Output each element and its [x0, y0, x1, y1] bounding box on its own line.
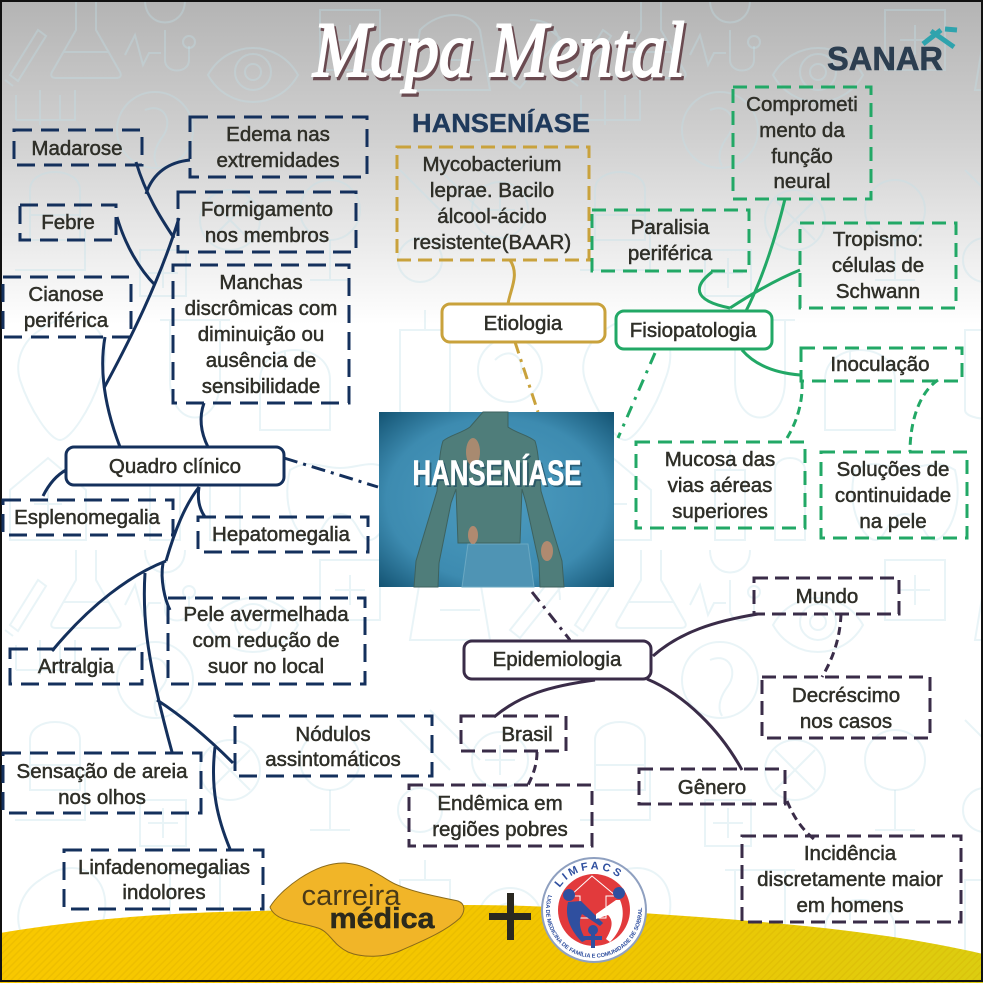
node: Fisiopatologia — [616, 311, 772, 349]
box: Nódulos assintomáticos — [235, 716, 432, 776]
box: Decréscimo nos casos — [762, 677, 930, 738]
yellow bottom wave — [0, 905, 983, 983]
central image: hanseníase: HANSENÍASE — [414, 455, 584, 495]
box: Hepatomegalia — [198, 517, 368, 552]
logo: SANAR: SANAR — [827, 40, 943, 77]
logo: LIMFACS: LIMFACS — [554, 862, 622, 888]
box: Comprometimento da função neural: mento da — [759, 119, 845, 142]
box: Cianose periférica: Cianose — [28, 283, 104, 306]
box: Tropismo: células de — [832, 254, 924, 277]
central image: hanseníase: HANSENÍASE — [412, 453, 582, 493]
logo: LIMFACS — [541, 857, 647, 963]
connectors: epidemiologia — [494, 592, 841, 840]
box: Pele avermelhada: com redução de — [192, 629, 340, 652]
node: Fisiopatologia: Fisiopatologia — [630, 319, 757, 342]
box: Comprometimento da função neural: função — [771, 145, 833, 168]
box: Linfadenomegalias indolores: indolores — [122, 881, 206, 904]
box: Esplenomegalia: Esplenomegalia — [14, 506, 161, 529]
box: Hepatomegalia: Hepatomegalia — [212, 523, 351, 546]
box: Endêmica em regiões pobres — [409, 785, 592, 846]
node: Etiologia — [442, 304, 605, 342]
box: Incidência: discretamente maior — [757, 868, 943, 891]
box: Manchas discrômicas — [173, 265, 349, 403]
box: Nódulos assintomáticos: Nódulos — [295, 723, 371, 746]
box: Gênero: Gênero — [678, 776, 746, 799]
node: Epidemiologia — [464, 641, 651, 679]
title: Mapa Mental: Mapa Mental — [312, 6, 685, 93]
title: Mapa Mental: Mapa Mental — [314, 9, 687, 96]
box: Linfadenomegalias indolores — [64, 850, 263, 909]
box: Manchas discrômicas: discrômicas com — [185, 297, 337, 320]
box: Tropismo: Schwann — [836, 280, 920, 303]
box: Artralgia: Artralgia — [38, 655, 115, 678]
central image: hanseníase — [379, 412, 614, 587]
box: Edema nas extremidades: extremidades — [216, 149, 340, 172]
box: Paralisia periférica: Paralisia — [631, 216, 710, 239]
node: Quadro clínico — [66, 447, 284, 485]
box: Manchas discrômicas: diminuição ou — [198, 323, 324, 346]
heading: HANSENÍASE: HANSENÍASE — [412, 108, 590, 138]
box: Cianose periférica — [3, 277, 131, 337]
box: etiologia description: leprae. Bacilo — [430, 179, 554, 202]
box: Mundo: Mundo — [796, 585, 858, 608]
box: Febre: Febre — [41, 211, 95, 234]
box: Edema nas extremidades: Edema nas — [226, 123, 330, 146]
figure — [414, 412, 564, 587]
box: Gênero — [639, 769, 785, 804]
box: Tropismo: Tropismo: — [833, 228, 923, 251]
connectors: fisiopatologia — [618, 199, 938, 452]
plus sign — [489, 893, 531, 940]
box: Manchas discrômicas: sensibilidade — [202, 375, 320, 398]
logo: SANAR — [827, 29, 957, 77]
box: Madarose: Madarose — [31, 137, 123, 160]
box: Soluções de continuidade na pele: na pele — [859, 510, 927, 533]
box: Pele avermelhada — [168, 598, 365, 684]
box: Cianose periférica: periférica — [24, 309, 109, 332]
box: Artralgia — [10, 649, 142, 684]
box: Inoculação: Inoculação — [830, 353, 930, 376]
box: Soluções de continuidade na pele: continuidade — [835, 484, 951, 507]
box: Paralisia periférica — [592, 210, 749, 271]
box: Madarose — [14, 130, 142, 165]
box: Manchas discrômicas: ausência de — [206, 349, 316, 372]
box: Linfadenomegalias indolores: Linfadenomegalias — [78, 856, 250, 879]
box: Brasil — [461, 716, 566, 751]
box: Mundo — [754, 578, 899, 614]
box: etiologia description: álcool-ácido — [437, 205, 547, 228]
box: Incidência — [742, 836, 961, 922]
connectors: etiologia — [508, 260, 538, 412]
box: Endêmica em regiões pobres: regiões pobres — [432, 818, 568, 841]
node: Epidemiologia: Epidemiologia — [493, 648, 622, 671]
box: Brasil: Brasil — [501, 723, 553, 746]
box: Mucosa das vias aéreas superiores: Mucosa das — [665, 448, 775, 471]
box: etiologia description: Mycobacterium — [422, 153, 562, 176]
node: Etiologia: Etiologia — [484, 312, 563, 335]
box: Mucosa das vias aéreas superiores — [636, 442, 805, 528]
box: Sensação de areia nos olhos: nos olhos — [58, 786, 146, 809]
box: Comprometimento da função neural: Comprometi — [746, 93, 858, 116]
box: Inoculação — [801, 348, 962, 381]
box: Decréscimo nos casos: nos casos — [800, 710, 892, 733]
box: Pele avermelhada: Pele avermelhada — [183, 603, 349, 626]
logo: carreira médica: carreira — [302, 880, 401, 912]
logo: LIMFACS: LIGA DE MEDICINA DE FAMÍLIA E COMUNIDADE DE SOBRAL — [546, 895, 642, 958]
box: Sensação de areia nos olhos — [3, 753, 201, 813]
box: Soluções de continuidade na pele: Soluções de — [837, 458, 949, 481]
logo: carreira médica: médica — [330, 903, 435, 935]
box: etiologia description: resistente(BAAR) — [413, 231, 571, 254]
box: Endêmica em regiões pobres: Endêmica em — [437, 792, 563, 815]
box: Formigamento nos membros: Formigamento — [201, 198, 333, 221]
box: Comprometimento da função neural — [733, 87, 871, 199]
box: Formigamento nos membros — [178, 192, 356, 252]
box: Soluções de continuidade na pele — [821, 452, 967, 538]
box: etiologia description — [397, 147, 589, 260]
box: Paralisia periférica: periférica — [628, 242, 713, 265]
box: Edema nas extremidades — [190, 117, 367, 177]
box: Formigamento nos membros: nos membros — [205, 224, 329, 247]
box: Esplenomegalia — [3, 500, 173, 535]
box: Pele avermelhada: suor no local — [208, 655, 324, 678]
box: Mucosa das vias aéreas superiores: vias aéreas — [668, 474, 772, 497]
box: Mucosa das vias aéreas superiores: superiores — [672, 500, 768, 523]
box: Sensação de areia nos olhos: Sensação de areia — [17, 760, 188, 783]
box: Manchas discrômicas: Manchas — [219, 271, 303, 294]
box: Decréscimo nos casos: Decréscimo — [792, 684, 900, 707]
node: Quadro clínico: Quadro clínico — [109, 455, 241, 478]
box: Nódulos assintomáticos: assintomáticos — [265, 748, 401, 771]
logo: carreira médica — [270, 863, 464, 956]
connectors: quadro clínico — [43, 160, 378, 849]
box: Incidência: Incidência — [804, 842, 897, 865]
box: Febre — [20, 205, 116, 240]
box: Comprometimento da função neural: neural — [774, 170, 830, 193]
box: Tropismo — [800, 223, 956, 308]
box: Incidência: em homens — [796, 894, 904, 917]
